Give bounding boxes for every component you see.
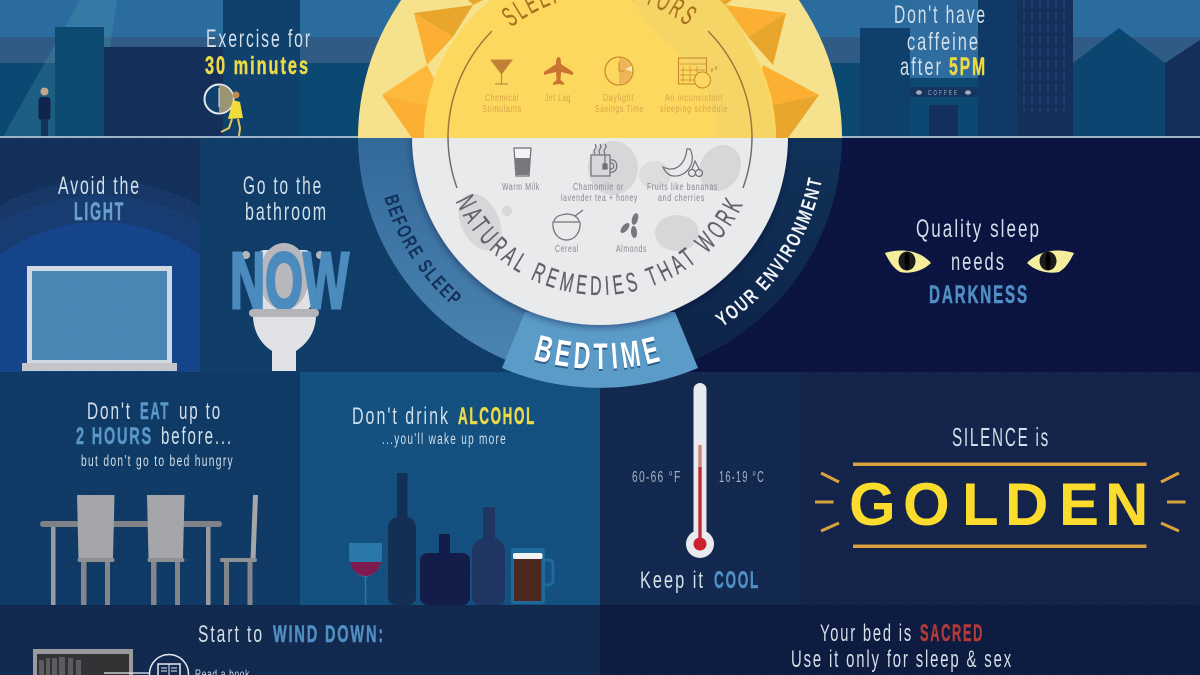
wind down heading: Start to bbox=[198, 621, 264, 648]
caffeine text: Don't have bbox=[894, 1, 987, 29]
illustration: bookshelf bbox=[33, 649, 149, 675]
figure: standing man bbox=[38, 88, 50, 136]
sacred bed text: Your bed is bbox=[820, 620, 913, 647]
silence text: SILENCE is bbox=[952, 422, 1050, 452]
panel: alcohol bbox=[300, 372, 600, 605]
label: chemical stimulants: Chemical bbox=[485, 92, 519, 104]
alcohol text: ...you'll wake up more bbox=[382, 431, 507, 448]
eating text: Don't bbox=[87, 398, 132, 425]
label: inconsistent schedule: sleeping schedule bbox=[660, 103, 728, 115]
panel: don't eat bbox=[0, 372, 300, 605]
panel: silence bbox=[800, 372, 1200, 605]
light text: Avoid the bbox=[58, 172, 141, 200]
eating text: up to bbox=[179, 398, 222, 425]
icon: right cat eye bbox=[1027, 250, 1074, 273]
label: chamomile tea: Chamomile or bbox=[573, 181, 624, 193]
section tab: bedtime bbox=[502, 312, 698, 388]
panel: go to the bathroom bbox=[200, 138, 600, 372]
wine glass bbox=[349, 543, 382, 605]
darkness text bbox=[916, 215, 1041, 309]
eating text: 2 HOURS bbox=[76, 423, 153, 450]
thermometer bbox=[686, 383, 714, 558]
label: bedtime: BEDTIME bbox=[534, 335, 660, 371]
panel: daytime city scene bbox=[0, 0, 1200, 138]
panel: temperature bbox=[600, 372, 800, 605]
label: daylight savings: Savings Time bbox=[595, 103, 644, 115]
heading: natural remedies: NATURAL REMEDIES THAT WORK bbox=[456, 194, 743, 296]
label: chamomile tea bbox=[561, 181, 638, 204]
label: jet lag: Jet Lag bbox=[545, 92, 571, 104]
label: chamomile tea: lavender tea + honey bbox=[561, 192, 638, 204]
beer mug bbox=[511, 548, 553, 604]
label: chemical stimulants: Stimulants bbox=[482, 103, 522, 115]
label: cereal: Cereal bbox=[555, 243, 579, 255]
caffeine text: 5PM bbox=[949, 53, 987, 81]
golden wordmark bbox=[815, 462, 1186, 548]
label: inconsistent schedule bbox=[660, 92, 728, 115]
eating text: but don't go to bed hungry bbox=[81, 453, 234, 470]
caffeine text bbox=[894, 1, 987, 81]
label: inconsistent schedule: An inconsistant bbox=[665, 92, 723, 104]
sun: sleep disruptors bbox=[358, 0, 842, 138]
icon: glass of milk bbox=[514, 148, 531, 176]
eating text: EAT bbox=[140, 398, 170, 425]
exercise text: 30 minutes bbox=[205, 52, 310, 80]
moon: natural remedies bbox=[412, 137, 788, 325]
keep it cool text: Keep it bbox=[640, 567, 705, 594]
icon: calendar with sleeping face bbox=[678, 58, 717, 88]
label: almonds: Almonds bbox=[616, 243, 647, 255]
wind down heading bbox=[198, 621, 385, 648]
caffeine text: after bbox=[900, 53, 943, 81]
label: fruits: and cherries bbox=[658, 192, 705, 204]
icon: toilet with NOW bbox=[230, 236, 349, 371]
eating text bbox=[76, 398, 234, 470]
alcohol text: ALCOHOL bbox=[458, 403, 536, 430]
wind down heading: WIND DOWN: bbox=[273, 621, 385, 648]
icon: clock bbox=[605, 57, 633, 85]
light text: LIGHT bbox=[74, 198, 125, 226]
label: chemical stimulants bbox=[482, 92, 522, 115]
panel: wind down bbox=[0, 605, 600, 675]
label: fruits: Fruits like bananas bbox=[647, 181, 718, 193]
icon: almonds bbox=[619, 212, 639, 238]
sacred bed text bbox=[791, 620, 1013, 673]
temperature labels bbox=[632, 469, 765, 486]
exercise text bbox=[205, 25, 312, 80]
arc divider bbox=[448, 31, 752, 188]
alcohol text: Don't drink bbox=[352, 403, 450, 430]
label: before sleep: BEFORE SLEEP bbox=[384, 194, 461, 302]
darkness text: needs bbox=[951, 248, 1006, 276]
label: your environment: YOUR ENVIRONMENT bbox=[714, 177, 822, 326]
section band: before sleep bbox=[358, 137, 600, 379]
temperature labels: 60-66 °F bbox=[632, 469, 682, 486]
icon: banana and cherries bbox=[663, 149, 702, 176]
icon: half hour clock bbox=[204, 84, 234, 114]
coffee shop sign bbox=[910, 87, 978, 97]
sacred bed text: SACRED bbox=[920, 620, 984, 647]
illustration: table and chairs bbox=[40, 495, 258, 605]
icon: read a book bbox=[150, 654, 188, 675]
bathroom text bbox=[243, 172, 328, 226]
temperature labels: 16-19 °C bbox=[719, 469, 765, 486]
illustration: bottles and glasses bbox=[349, 473, 553, 605]
alcohol text bbox=[352, 403, 536, 448]
bathroom text: bathroom bbox=[245, 198, 328, 226]
panel: darkness bbox=[600, 138, 1200, 372]
eating text: before... bbox=[161, 423, 233, 450]
darkness text: DARKNESS bbox=[929, 281, 1029, 309]
keep it cool text: COOL bbox=[714, 567, 760, 594]
section band: your environment bbox=[600, 137, 842, 379]
icon: plane bbox=[544, 57, 573, 85]
golden wordmark: GOLDEN bbox=[849, 471, 1148, 538]
sacred bed text: Use it only for sleep & sex bbox=[791, 646, 1013, 673]
darkness text: Quality sleep bbox=[916, 215, 1041, 243]
exercise text: Exercise for bbox=[206, 25, 312, 53]
label: fruits bbox=[647, 181, 718, 204]
icon: toilet with NOW: NOW bbox=[230, 236, 349, 325]
label: daylight savings: Daylight bbox=[603, 92, 634, 104]
icon: tea mug bbox=[591, 144, 617, 176]
icon: cereal bowl bbox=[553, 210, 583, 240]
icon: laptop bbox=[22, 266, 177, 371]
caffeine text: caffeine bbox=[907, 28, 980, 56]
coffee shop sign: COFFEE bbox=[928, 90, 959, 97]
figure: yellow runner bbox=[221, 92, 243, 136]
label: daylight savings bbox=[595, 92, 644, 115]
icon: martini bbox=[491, 60, 512, 84]
panel: sacred bed bbox=[600, 605, 1200, 675]
bathroom text: Go to the bbox=[243, 172, 323, 200]
panel: avoid the light bbox=[0, 138, 200, 372]
icon: left cat eye bbox=[885, 250, 931, 273]
light text bbox=[58, 172, 141, 226]
label: warm milk: Warm Milk bbox=[502, 181, 540, 193]
